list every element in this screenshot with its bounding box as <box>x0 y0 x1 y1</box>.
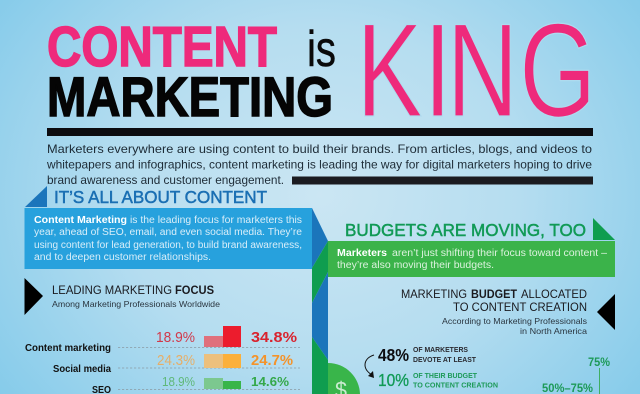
heading: marketing budget allocated: TO CONTENT CREATION <box>453 300 587 314</box>
heading: marketing budget allocated: in North America <box>520 326 587 336</box>
callout: share of marketers: 48% <box>378 345 409 365</box>
panel: budgets summary: aren’t just shifting their focus toward content – <box>392 248 608 259</box>
row: social media <box>53 353 300 375</box>
chart: budget share labels: 75% <box>588 355 610 369</box>
callout: share of marketers: TO CONTENT CREATION <box>413 380 498 390</box>
intro paragraph: Marketers everywhere are using content to build their brands. From articles, blogs, and videos to <box>47 143 592 156</box>
icon: dollar circle <box>328 363 360 394</box>
title: is <box>307 21 336 77</box>
heading: marketing budget allocated: ALLOCATED <box>521 287 587 301</box>
panel: content marketing summary: year, ahead of SEO, email, and even social media. They’re <box>34 227 303 238</box>
title: CONTENT <box>47 15 277 79</box>
intro paragraph <box>46 128 593 187</box>
row: social media: 24.3% <box>157 353 195 369</box>
panel: budgets summary: Marketers <box>337 248 388 259</box>
row: seo <box>92 374 300 394</box>
row: seo: 14.6% <box>251 374 289 389</box>
title: MARKETING <box>47 65 333 128</box>
heading: budgets are moving: BUDGETS ARE MOVING, TOO <box>345 220 586 240</box>
heading: marketing budget allocated: MARKETING <box>401 287 467 301</box>
heading: leading marketing focus <box>24 278 220 315</box>
heading: leading marketing focus: FOCUS <box>175 283 214 297</box>
panel: content marketing summary <box>24 208 312 269</box>
panel: content marketing summary: Content Marketing <box>34 215 127 226</box>
callout: share of marketers: 10% <box>378 370 409 390</box>
panel: content marketing summary: and to deepen customer relationships. <box>34 252 211 263</box>
callout: share of marketers: DEVOTE AT LEAST <box>413 355 477 364</box>
row: social media: Social media <box>53 364 112 375</box>
heading: marketing budget allocated: According to Marketing Professionals <box>442 316 587 326</box>
heading: it's all about content: IT’S ALL ABOUT CONTENT <box>54 187 267 207</box>
callout: share of marketers: OF THEIR BUDGET <box>413 371 478 380</box>
row: content marketing: 18.9% <box>156 329 195 346</box>
panel: budgets summary <box>328 241 615 277</box>
row: seo: 18.9% <box>162 374 195 389</box>
arrow: curved down <box>365 355 374 378</box>
chart: leading marketing focus <box>25 326 300 394</box>
panel: budgets summary: they’re also moving their budgets. <box>337 260 494 271</box>
intro paragraph: whitepapers and infographics, content marketing is leading the way for digital marketers hoping to drive <box>46 158 592 172</box>
central ribbon <box>312 208 328 394</box>
heading: marketing budget allocated <box>401 287 615 336</box>
callout: share of marketers <box>365 345 498 390</box>
chart: budget share labels <box>542 355 610 394</box>
heading: leading marketing focus: Among Marketing Professionals Worldwide <box>52 299 220 309</box>
row: content marketing: 34.8% <box>251 329 297 346</box>
heading: leading marketing focus: LEADING MARKETING <box>52 283 172 297</box>
row: content marketing: Content marketing <box>25 343 111 354</box>
row: social media: 24.7% <box>251 353 293 369</box>
intro paragraph: brand awareness and customer engagement. <box>47 174 284 187</box>
panel: content marketing summary: using content for lead generation, to build brand awareness, <box>34 240 302 251</box>
row: content marketing <box>25 326 300 354</box>
heading: marketing budget allocated: BUDGET <box>471 287 518 301</box>
panel: content marketing summary: is the leading focus for marketers this <box>130 215 302 226</box>
callout: share of marketers: OF MARKETERS <box>413 345 468 354</box>
title <box>47 0 596 144</box>
